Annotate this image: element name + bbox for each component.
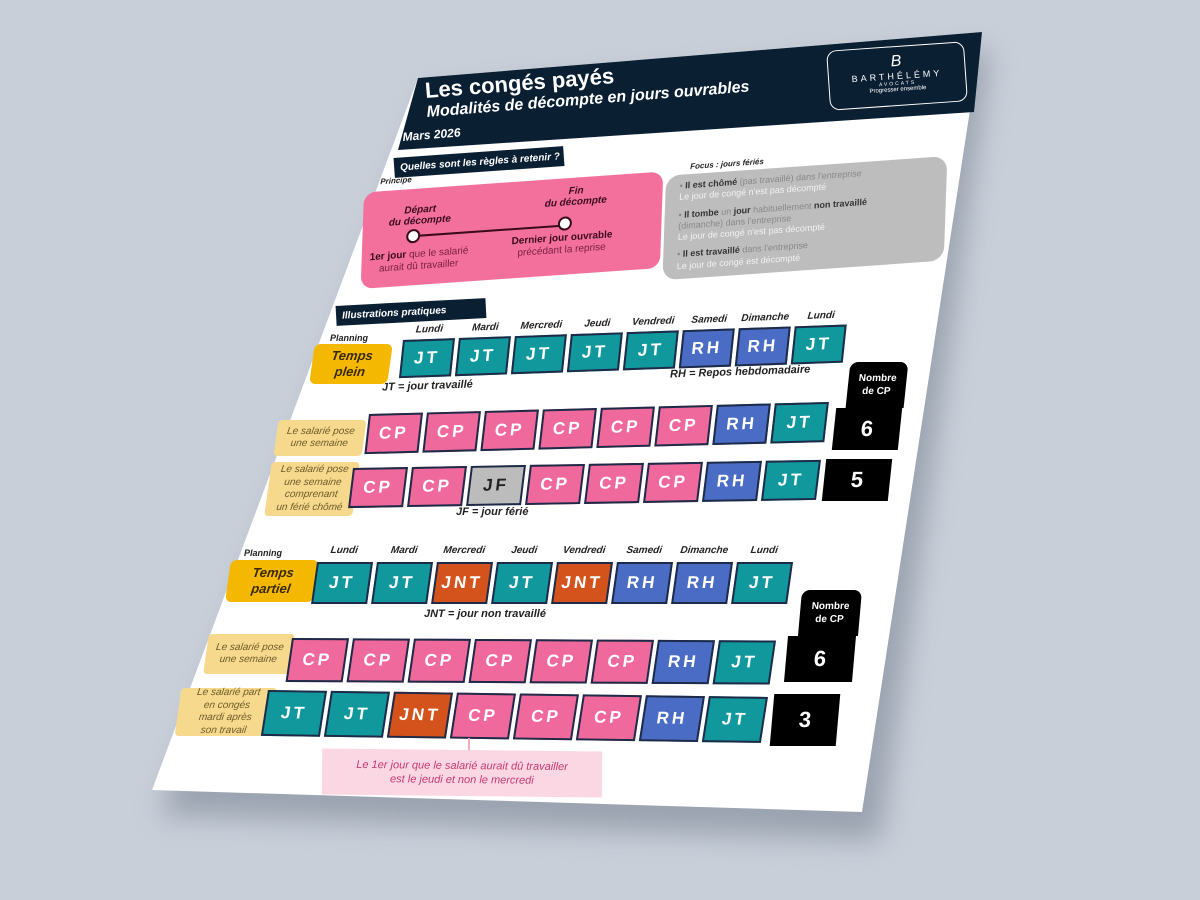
header: nombre de CP 2: de CP: [815, 614, 844, 625]
row: temps partiel schedule: RH: [686, 573, 719, 592]
row: temps partiel schedule: JT: [508, 573, 536, 592]
header: nombre de CP 1: Nombre: [858, 373, 897, 384]
panel: principe: Principe: [380, 175, 412, 186]
panel: focus jours fériés: Le jour de congé est décompté: [677, 252, 800, 271]
tag: temps plein: Temps: [330, 348, 374, 363]
row: temps partiel schedule: RH: [626, 573, 659, 592]
row: semaine CP partiel: CP: [301, 650, 334, 669]
callout connector: [468, 738, 470, 752]
row: semaine avec JF: RH: [716, 471, 748, 491]
header: nombre de CP 2: [798, 590, 862, 636]
day labels 1: Mardi: [471, 322, 499, 334]
row: semaine CP: CP: [668, 415, 700, 435]
count 6 partiel: 6: [813, 646, 827, 671]
panel: principe: Départ: [404, 203, 436, 217]
row: temps partiel schedule: JT: [328, 573, 356, 592]
row: semaine CP partiel: CP: [484, 651, 517, 670]
row: semaine CP: CP: [494, 420, 526, 440]
row: temps plein schedule: JT: [581, 342, 609, 362]
tag: temps partiel: Temps: [251, 565, 295, 580]
row: part mardi: JT: [721, 709, 749, 729]
day labels 2: Mercredi: [443, 545, 486, 556]
day labels 2: [330, 545, 779, 556]
callout: Le 1er jour que le salarié aurait dû travailler: [356, 759, 568, 773]
day labels 2: Mardi: [390, 545, 418, 556]
count 3: [770, 694, 840, 746]
tag: temps plein: [309, 344, 393, 384]
label: semaine avec férié: Le salarié pose: [280, 464, 349, 475]
panel: principe: Dernier jour ouvrable: [511, 229, 613, 247]
panel: principe: précédant la reprise: [517, 242, 606, 259]
panel: principe: du décompte: [544, 195, 607, 210]
label: salarié pose une semaine 2: une semaine: [219, 654, 278, 665]
label: part mardi: son travail: [200, 724, 247, 736]
title: Modalités de décompte en jours ouvrables: [426, 79, 750, 121]
day labels 1: Vendredi: [631, 315, 675, 328]
logo: AVOCATS: [879, 80, 916, 88]
row: semaine CP: CP: [552, 418, 584, 438]
count 6: [832, 408, 902, 450]
label: part mardi: [175, 688, 277, 736]
label: salarié pose une semaine 2: [203, 634, 295, 674]
date: Mars 2026: [402, 125, 461, 144]
count 6: 6: [860, 416, 874, 441]
panel: principe: aurait dû travailler: [379, 258, 458, 275]
row: semaine CP: [364, 402, 829, 454]
row: semaine CP: RH: [725, 414, 758, 434]
count 6 partiel: [784, 636, 856, 682]
row: temps plein schedule: JT: [637, 340, 665, 360]
row: part mardi: JT: [280, 703, 308, 723]
row: semaine avec JF: [348, 460, 821, 508]
label: planning 2: Planning: [244, 548, 282, 558]
label: part mardi: mardi après: [198, 712, 252, 723]
label: salarié pose une semaine 2: Le salarié pose: [215, 642, 285, 652]
row: part mardi: CP: [467, 706, 499, 725]
legend JT: JT = jour travaillé: [382, 378, 473, 394]
tag: temps partiel: [225, 560, 319, 602]
panel: focus jours fériés: Le jour de congé n'est pas décompté: [679, 182, 826, 202]
heading: illustrations: Illustrations pratiques: [342, 305, 447, 321]
legend JNT: JNT = jour non travaillé: [424, 608, 546, 620]
heading: rules: [394, 146, 564, 178]
count 5: [822, 459, 892, 501]
row: semaine CP: CP: [610, 417, 642, 437]
row: semaine CP partiel: [286, 638, 776, 684]
callout: est le jeudi et non le mercredi: [390, 773, 534, 787]
row: semaine avec JF: CP: [362, 477, 394, 497]
row: semaine CP partiel: RH: [667, 652, 700, 671]
row: temps plein schedule: JT: [469, 346, 497, 366]
label: part mardi: Le salarié part: [196, 687, 261, 698]
row: semaine CP: CP: [378, 423, 410, 443]
row: part mardi: JNT: [398, 705, 442, 724]
panel: principe: Fin: [568, 185, 584, 197]
count 5: 5: [850, 467, 864, 492]
logo: BARTHÉLÉMY: [851, 68, 943, 84]
row: semaine CP: CP: [436, 421, 468, 441]
day labels 2: Samedi: [626, 545, 663, 556]
label: planning 1: Planning: [330, 333, 368, 343]
row: temps plein schedule: RH: [747, 336, 779, 356]
row: temps partiel schedule: JT: [748, 573, 776, 592]
legend JF: JF = jour férié: [456, 506, 528, 518]
row: semaine CP partiel: CP: [606, 652, 639, 671]
row: semaine avec JF: CP: [421, 476, 453, 496]
row: temps partiel schedule: JNT: [440, 573, 484, 592]
label: semaine avec férié: comprenant: [284, 489, 338, 500]
header: nombre de CP 1: [846, 362, 908, 408]
row: part mardi: [260, 690, 768, 743]
label: salarié pose une semaine: Le salarié pose: [286, 426, 356, 436]
panel: focus jours fériés: Le jour de congé n'est pas décompté: [678, 222, 825, 242]
logo: Progresser ensemble: [869, 85, 927, 95]
day labels 1: Lundi: [415, 324, 444, 336]
day labels 2: Dimanche: [680, 545, 729, 556]
day labels 2: Vendredi: [562, 545, 606, 556]
logo: B: [890, 53, 902, 70]
panel: focus jours fériés: [662, 157, 947, 280]
day labels 1: Mercredi: [520, 319, 563, 332]
row: temps plein schedule: RH: [691, 338, 723, 358]
label: part mardi: en congés: [203, 700, 251, 710]
heading: illustrations: [336, 298, 486, 326]
day labels 2: Lundi: [750, 545, 779, 556]
tag: temps plein: plein: [334, 364, 366, 379]
row: part mardi: JT: [343, 704, 371, 723]
panel: focus jours fériés: Focus : jours fériés: [690, 157, 764, 171]
panel: focus jours fériés: • Il est travaillé dans l'entreprise: [677, 240, 808, 259]
row: semaine avec JF: CP: [657, 472, 689, 492]
row: semaine avec JF: JT: [777, 470, 805, 490]
day labels 2: Lundi: [330, 545, 359, 556]
row: temps partiel schedule: [311, 562, 793, 604]
label: salarié pose une semaine: [273, 420, 367, 456]
label: semaine avec férié: une semaine: [284, 476, 342, 488]
panel: principe: du décompte: [389, 213, 451, 229]
row: semaine CP partiel: CP: [423, 651, 456, 670]
row: semaine CP partiel: JT: [730, 652, 759, 671]
panel: focus jours fériés: (dimanche) dans l'entreprise: [678, 213, 791, 231]
row: semaine CP partiel: CP: [545, 651, 578, 670]
logo: [826, 41, 968, 111]
row: part mardi: RH: [655, 708, 689, 728]
title: Les congés payés: [424, 63, 615, 103]
header: nombre de CP 2: Nombre: [811, 601, 850, 612]
legend RH: RH = Repos hebdomadaire: [670, 364, 810, 380]
callout: [322, 749, 602, 797]
row: part mardi: CP: [530, 707, 562, 726]
row: semaine CP partiel: CP: [362, 650, 395, 670]
day labels 1: Lundi: [807, 310, 835, 322]
row: temps plein schedule: JT: [805, 334, 833, 354]
day labels 1: Samedi: [691, 314, 728, 326]
count 3: 3: [798, 707, 812, 732]
day labels 2: Jeudi: [510, 545, 538, 556]
row: temps partiel schedule: JNT: [560, 573, 604, 592]
row: semaine avec JF: CP: [539, 474, 571, 494]
row: semaine avec JF: JF: [482, 475, 510, 495]
section: temps partiel: [175, 545, 862, 798]
panel: principe: [361, 172, 663, 288]
row: temps partiel schedule: JT: [388, 573, 416, 592]
day labels 1: Dimanche: [741, 311, 790, 324]
header: nombre de CP 1: de CP: [862, 386, 891, 397]
tag: temps partiel: partiel: [250, 581, 292, 596]
label: salarié pose une semaine: une semaine: [290, 438, 349, 449]
row: temps plein schedule: JT: [413, 348, 441, 368]
row: part mardi: CP: [593, 708, 625, 727]
row: semaine avec JF: CP: [598, 473, 630, 493]
row: semaine CP: JT: [786, 412, 814, 432]
label: semaine avec férié: [264, 462, 360, 516]
panel: focus jours fériés: • Il est chômé (pas travaillé) dans l'entreprise: [679, 168, 862, 191]
row: temps plein schedule: JT: [525, 344, 553, 364]
day labels 1: Jeudi: [584, 318, 611, 330]
panel: focus jours fériés: • Il tombe un jour habituellement non travaillé: [678, 196, 867, 219]
panel: principe: 1er jour que le salarié: [369, 245, 469, 263]
day labels 1: [415, 310, 836, 336]
row: temps plein schedule: [399, 324, 847, 378]
heading: rules: Quelles sont les règles à retenir ?: [400, 151, 560, 173]
label: semaine avec férié: un férié chômé: [276, 502, 343, 512]
section: temps plein: [264, 310, 908, 518]
